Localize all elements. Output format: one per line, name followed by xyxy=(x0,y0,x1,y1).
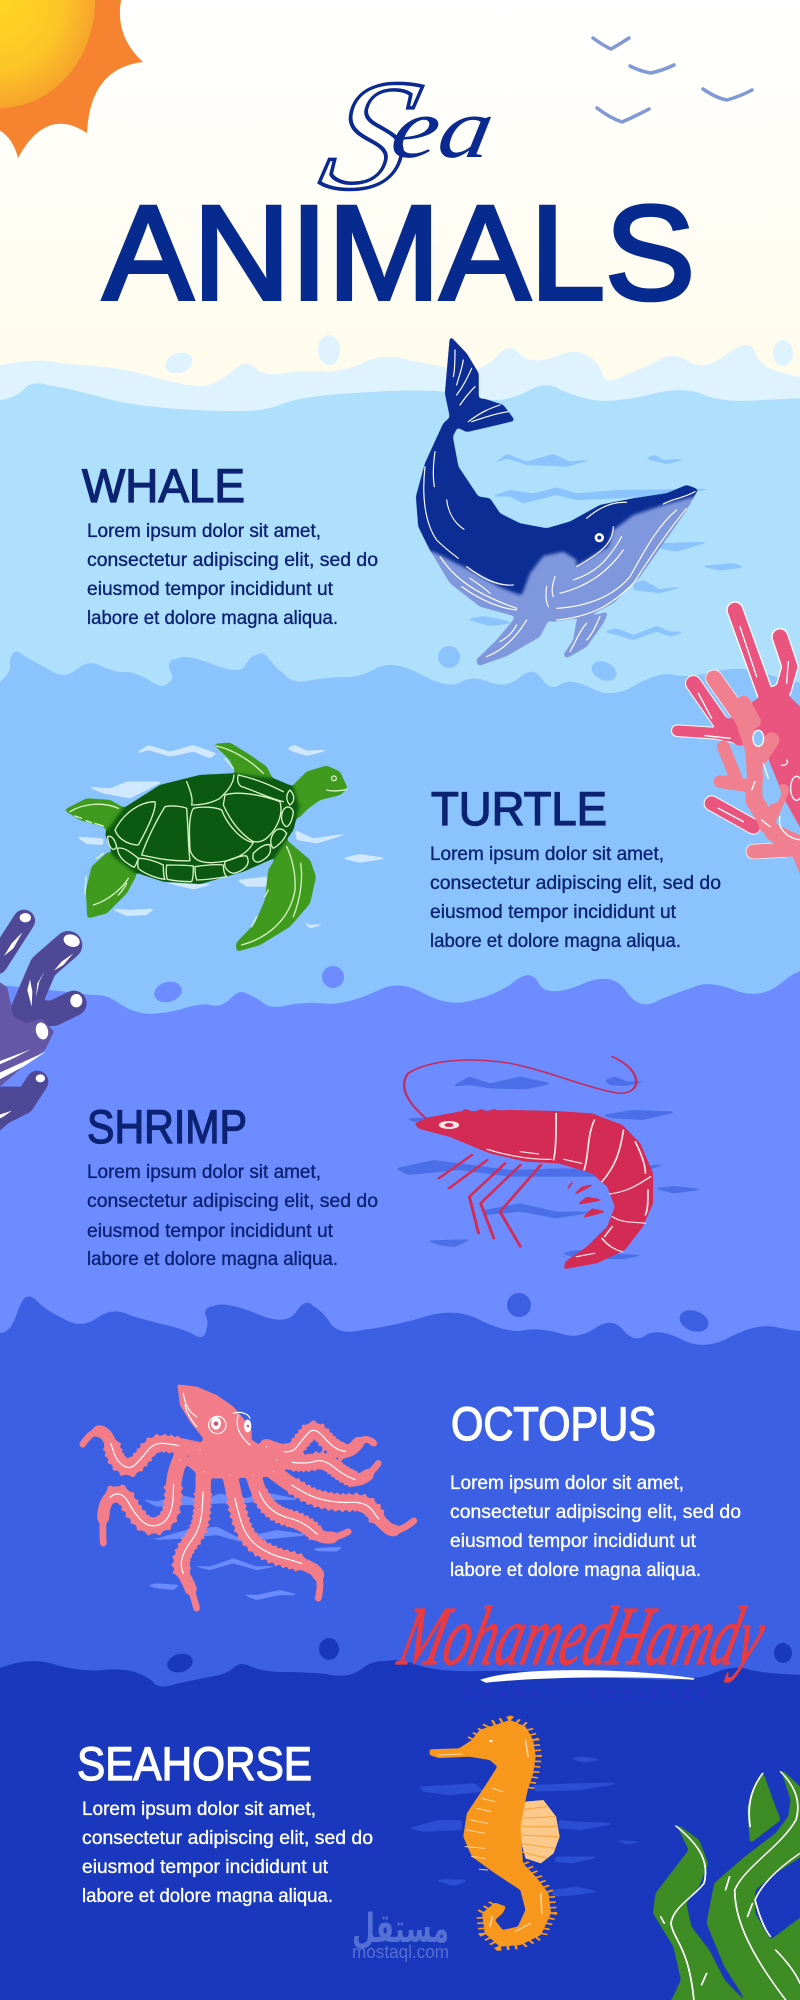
text block: octopus description: eiusmod tempor incididunt ut xyxy=(450,1530,697,1552)
text block: whale description: Lorem ipsum dolor sit amet, xyxy=(87,520,321,542)
panel: turtle xyxy=(64,743,388,952)
text block: shrimp description: eiusmod tempor incididunt ut xyxy=(87,1220,334,1242)
seahorse ripples xyxy=(408,1757,645,1897)
turtle ripples xyxy=(76,745,388,928)
text block: shrimp description: labore et dolore magna aliqua. xyxy=(87,1248,338,1270)
title: ANIMALS: ANIMALS xyxy=(103,179,695,328)
text block: seahorse description: Lorem ipsum dolor sit amet, xyxy=(82,1798,316,1820)
panel: octopus xyxy=(83,1384,414,1608)
icon: purple coral xyxy=(0,913,82,1133)
shrimp body xyxy=(414,1109,653,1269)
text block: octopus description: labore et dolore magna aliqua. xyxy=(450,1559,701,1581)
coral dark branches xyxy=(677,610,800,833)
seaweed highlights xyxy=(661,1772,800,2000)
signature swoosh xyxy=(482,1671,694,1682)
watermark: mostaql xyxy=(352,1906,449,1962)
seahorse fin xyxy=(518,1800,560,1863)
wave band: turtle water xyxy=(0,646,800,2000)
shrimp antenna and legs xyxy=(404,1057,636,1247)
coral light branches xyxy=(714,678,800,883)
heading: WHALE: WHALE xyxy=(82,459,245,512)
shrimp ripples xyxy=(395,1077,705,1259)
coral windows and highlights xyxy=(698,627,800,840)
seahorse body xyxy=(430,1720,551,1947)
whale body xyxy=(416,336,698,666)
heading: SEAHORSE: SEAHORSE xyxy=(77,1737,312,1790)
turtle body xyxy=(64,743,348,952)
text block: whale description: consectetur adipiscing elit, sed do xyxy=(87,549,378,571)
seaweed fronds xyxy=(653,1768,800,2000)
heading: OCTOPUS: OCTOPUS xyxy=(451,1397,656,1450)
designer signature xyxy=(391,1590,775,1700)
text block: turtle description: consectetur adipiscing elit, sed do xyxy=(430,872,721,894)
wave band: octopus water xyxy=(0,1293,800,2000)
purple coral branches xyxy=(0,921,74,1133)
icon: pink coral xyxy=(677,610,800,883)
octopus body and tentacles xyxy=(83,1384,414,1608)
seahorse markings xyxy=(439,1740,542,1932)
text block: shrimp description: consectetur adipiscing elit, sed do xyxy=(87,1190,378,1212)
text block: seahorse description xyxy=(82,1798,373,1907)
octopus markings xyxy=(83,1393,414,1608)
heading: TURTLE: TURTLE xyxy=(431,782,607,835)
text block: shrimp description: Lorem ipsum dolor sit amet, xyxy=(87,1161,321,1183)
text block: turtle description: eiusmod tempor incididunt ut xyxy=(430,901,677,923)
text block: turtle description: labore et dolore magna aliqua. xyxy=(430,930,681,952)
whale markings xyxy=(424,350,695,657)
text block: whale description xyxy=(87,520,378,629)
sky background xyxy=(0,0,800,460)
title: Sea xyxy=(307,47,501,222)
panel: whale xyxy=(416,336,745,666)
text block: octopus description: Lorem ipsum dolor sit amet, xyxy=(450,1472,684,1494)
octopus ripples xyxy=(125,1493,343,1600)
text block: whale description: labore et dolore magna aliqua. xyxy=(87,607,338,629)
text block: octopus description: consectetur adipiscing elit, sed do xyxy=(450,1501,741,1523)
text block: seahorse description: consectetur adipiscing elit, sed do xyxy=(82,1827,373,1849)
icon: birds xyxy=(593,38,752,122)
text block: octopus description xyxy=(450,1472,741,1581)
panel: shrimp xyxy=(395,1057,705,1269)
text block: seahorse description: labore et dolore magna aliqua. xyxy=(82,1885,333,1907)
heading: SHRIMP: SHRIMP xyxy=(87,1100,247,1153)
watermark: mostaql: مستقل xyxy=(352,1906,449,1952)
text block: turtle description xyxy=(430,843,721,952)
turtle shell scutes and markings xyxy=(70,746,347,945)
shrimp markings xyxy=(439,1113,651,1257)
wave band: shrimp water xyxy=(0,966,800,2000)
watermark: mostaql: mostaql.com xyxy=(352,1942,449,1962)
text block: turtle description: Lorem ipsum dolor sit amet, xyxy=(430,843,664,865)
title: Sea: S xyxy=(307,47,435,222)
seahorse spines xyxy=(472,1720,551,1947)
purple coral light lobe xyxy=(0,980,54,1087)
icon: seaweed xyxy=(653,1768,800,2000)
title: Sea: ea xyxy=(385,81,501,176)
icon: sun xyxy=(0,0,143,158)
text block: seahorse description: eiusmod tempor incididunt ut xyxy=(82,1856,329,1878)
whale ripples xyxy=(467,454,745,640)
text block: shrimp description xyxy=(87,1161,378,1270)
panel: seahorse xyxy=(408,1720,645,1947)
purple coral highlights xyxy=(0,913,82,1119)
coral outline xyxy=(677,610,790,852)
wave band: seahorse water xyxy=(0,1638,800,2000)
text block: whale description: eiusmod tempor incididunt ut xyxy=(87,578,334,600)
signature subtitle: GRAPHIC DESIGNER xyxy=(464,1688,709,1700)
